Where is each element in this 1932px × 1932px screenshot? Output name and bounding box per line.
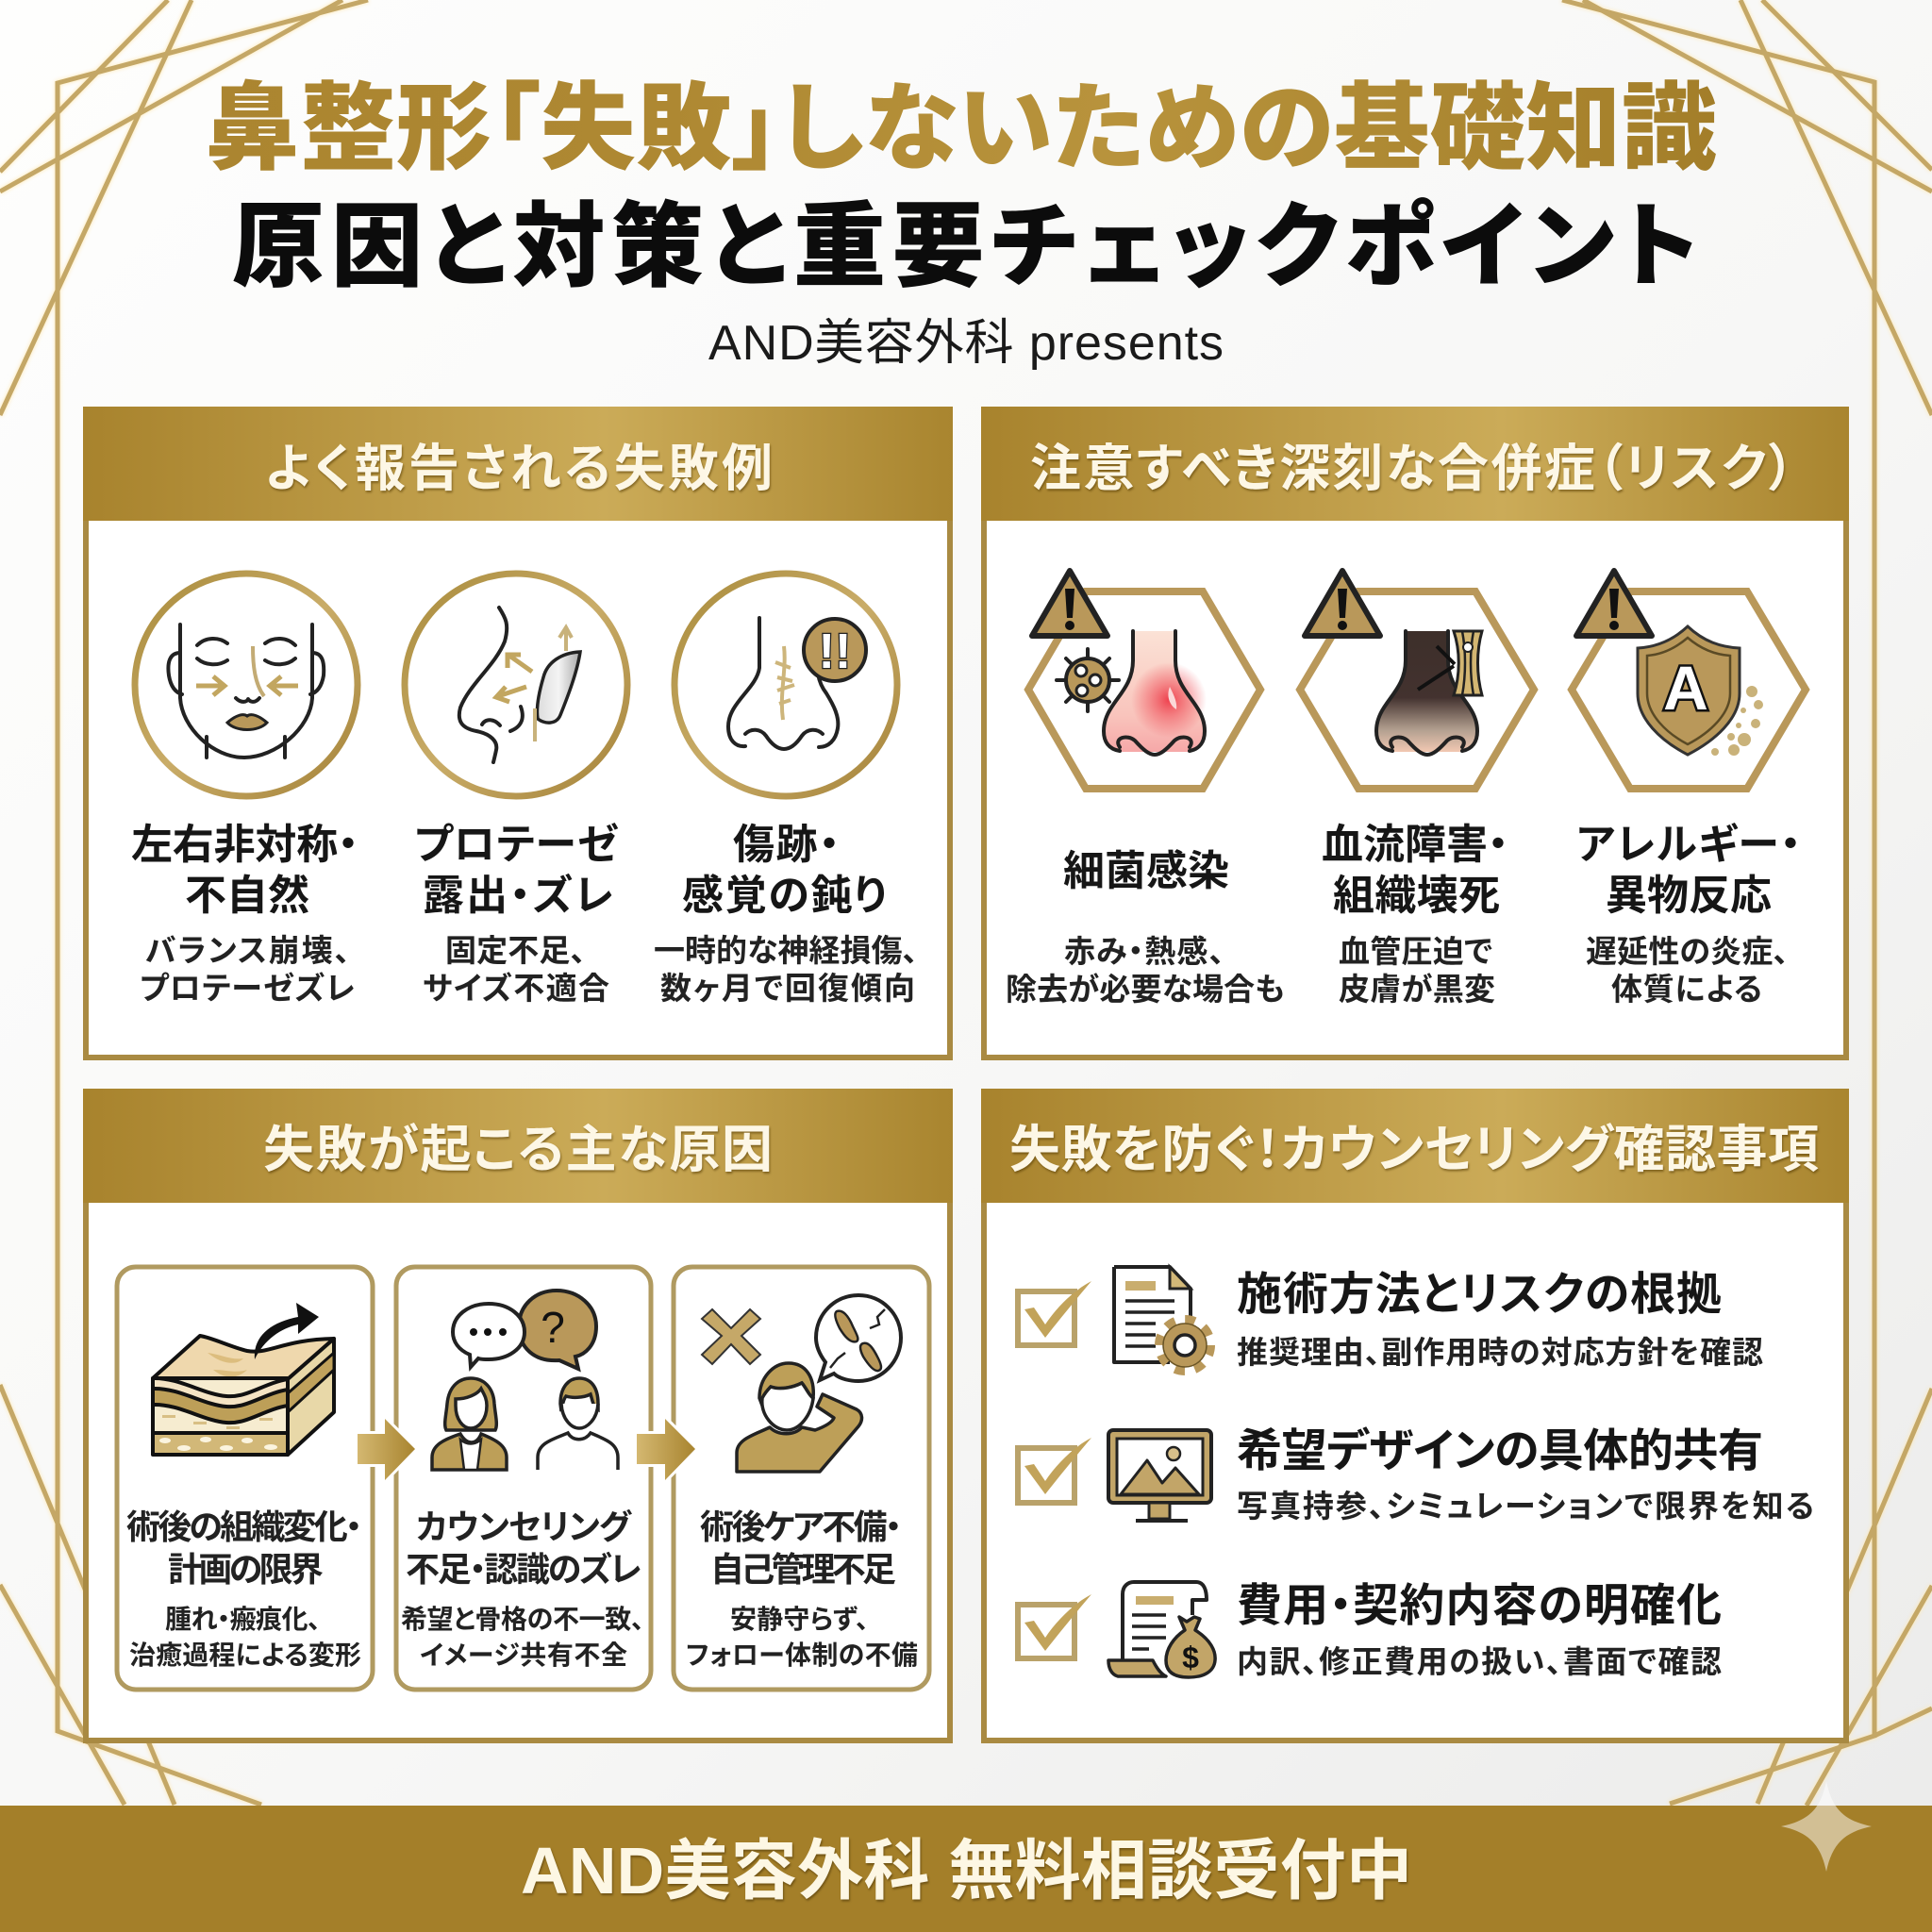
description: 固定不足、 (445, 933, 586, 968)
icon: shield with A: A (1663, 653, 1708, 723)
icon: upward arrow (255, 1303, 319, 1359)
icon: warning triangle (1032, 571, 1108, 636)
description: 一時的な神経損傷、 (654, 933, 918, 968)
description: 治癒過程による変形 (129, 1641, 361, 1670)
description (1006, 934, 1285, 1007)
item: scars and numbness (654, 574, 918, 1006)
panel 2 header band (981, 407, 1849, 521)
label: アレルギー・ (1576, 822, 1801, 868)
icon: nose with scar and alert: !! (819, 625, 851, 679)
description (129, 1605, 361, 1670)
footer text: AND美容外科 無料相談受付中 (521, 1834, 1412, 1907)
panel 2 body (984, 409, 1846, 1058)
label: 感覚の鈍り (682, 873, 887, 919)
icon: warning triangle (1576, 571, 1652, 636)
icon: monitor with image (1108, 1430, 1211, 1521)
label: 自己管理不足 (710, 1550, 896, 1589)
label: カウンセリング (416, 1507, 633, 1546)
icon: nose with scar and alert (675, 574, 897, 796)
label: プロテーゼ (414, 822, 618, 868)
item: asymmetry (131, 574, 358, 1006)
icon: speech bubbles (453, 1291, 596, 1369)
description: 赤み・熱感、 (1064, 934, 1224, 969)
subtitle: AND美容外科 presents (708, 316, 1224, 371)
icon: shield with A (1638, 626, 1740, 755)
description: 皮膚が黒変 (1339, 972, 1495, 1007)
icon: face in gold ring (135, 574, 358, 796)
label: 傷跡・ (733, 822, 840, 868)
description: 遅延性の炎症、 (1586, 934, 1789, 969)
description: 除去が必要な場合も (1006, 972, 1285, 1007)
label (131, 822, 358, 919)
description: 写真持参、シミュレーションで限界を知る (1237, 1489, 1814, 1524)
icon: inflamed nose (1104, 631, 1207, 755)
hexagon frame (1028, 591, 1260, 789)
description: サイズ不適合 (423, 971, 609, 1006)
panel 4 header band (981, 1089, 1849, 1203)
description (423, 933, 609, 1006)
label: 左右非対称・ (131, 822, 358, 868)
title: 施術方法とリスクの根拠 (1237, 1270, 1722, 1320)
title: 希望デザインの具体的共有 (1237, 1426, 1763, 1476)
description: 血管圧迫で (1339, 934, 1492, 969)
label: 術後の組織変化・ (126, 1507, 362, 1546)
icon: speech bubbles: ? (541, 1303, 565, 1352)
label: 異物反応 (1606, 873, 1772, 919)
label: 細菌感染 (1063, 848, 1229, 894)
hexagon frame (1300, 591, 1534, 789)
arrow: card 2 to card 3 (637, 1419, 695, 1480)
icon: X mark (702, 1309, 760, 1364)
description: 数ヶ月で回復傾向 (660, 971, 915, 1006)
card (117, 1267, 373, 1690)
arrow: card 1 to card 2 (358, 1419, 415, 1480)
cause card: counseling (396, 1267, 651, 1690)
label: 計画の限界 (168, 1550, 324, 1589)
checkbox (1018, 1594, 1091, 1658)
description: フォロー体制の不備 (686, 1641, 918, 1670)
panel 3 header band (83, 1089, 953, 1203)
description (140, 933, 355, 1006)
title line 1: 鼻整形「失敗」しないための基礎知識 (205, 76, 1717, 182)
panel 3 body (86, 1091, 950, 1740)
check item: design (1018, 1426, 1814, 1524)
icon: warning triangle (1305, 571, 1380, 636)
card (674, 1267, 929, 1690)
panel: counseling checklist (981, 1089, 1849, 1740)
label: 術後ケア不備・ (700, 1507, 902, 1546)
item: allergy (1572, 571, 1806, 1007)
description (1339, 934, 1495, 1007)
icon: document with gear (1114, 1267, 1210, 1371)
panel 1 header band (83, 407, 953, 521)
icon: worried person (737, 1363, 862, 1472)
panel 4 body (984, 1091, 1846, 1740)
label (406, 1507, 641, 1589)
panel 4 heading: 失敗を防ぐ！カウンセリング確認事項 (1009, 1122, 1819, 1178)
card (396, 1267, 651, 1690)
icon: necrotic nose (1376, 631, 1477, 755)
item: blood flow disorder (1300, 571, 1534, 1007)
label: 血流障害・ (1322, 822, 1508, 868)
icon: allergen particles (1711, 686, 1763, 756)
icon: skin layers (153, 1336, 334, 1455)
description: 安静守らず、 (730, 1605, 869, 1634)
icon: scroll contract and money bag (1108, 1582, 1215, 1677)
check item: cost (1018, 1581, 1722, 1679)
icon: bacterium (1057, 649, 1119, 711)
panel: common failures (83, 407, 953, 1058)
icon: nose profile with implant (405, 574, 627, 796)
panel 3 heading: 失敗が起こる主な原因 (263, 1122, 773, 1178)
item: bacterial infection (1006, 571, 1285, 1007)
description: 推奨理由、副作用時の対応方針を確認 (1237, 1335, 1763, 1370)
description: 体質による (1611, 972, 1762, 1007)
cause card: aftercare (674, 1267, 929, 1690)
label (414, 822, 618, 919)
label (1576, 822, 1801, 919)
panel 2 heading: 注意すべき深刻な合併症（リスク） (1030, 441, 1794, 497)
item: prosthesis exposure (405, 574, 627, 1006)
checkbox (1018, 1438, 1091, 1503)
footer band (0, 1806, 1932, 1932)
panel: serious complications (981, 407, 1849, 1058)
label: 露出・ズレ (423, 873, 613, 919)
label: 不足・認識のズレ (406, 1550, 641, 1589)
label: 組織壊死 (1333, 873, 1500, 919)
icon: scroll contract and money bag: $ (1182, 1641, 1199, 1674)
description: 腫れ・瘢痕化、 (165, 1605, 321, 1634)
hexagon frame (1572, 591, 1806, 789)
description: イメージ共有不全 (420, 1641, 627, 1670)
icon: sparkle star (1781, 1781, 1872, 1872)
icon: woman and man (432, 1378, 618, 1470)
check item: procedure (1018, 1267, 1763, 1371)
description (401, 1605, 644, 1670)
description: 内訳、修正費用の扱い、書面で確認 (1237, 1644, 1722, 1679)
label (126, 1507, 362, 1589)
description (654, 933, 918, 1006)
title: 費用・契約内容の明確化 (1237, 1581, 1722, 1631)
icon: compressed blood vessel (1418, 631, 1482, 695)
checkbox (1018, 1281, 1091, 1345)
panel: main causes (83, 1089, 953, 1740)
panel 1 body (86, 409, 950, 1058)
description (1586, 934, 1789, 1007)
panel 1 heading: よく報告される失敗例 (265, 441, 773, 497)
label (1322, 822, 1508, 919)
description: プロテーゼズレ (140, 971, 355, 1006)
description (686, 1605, 918, 1670)
label (700, 1507, 902, 1589)
cause card: tissue change (117, 1267, 373, 1690)
description: バランス崩壊、 (145, 933, 350, 968)
label (682, 822, 887, 919)
description: 希望と骨格の不一致、 (401, 1605, 644, 1634)
title line 2: 原因と対策と重要チェックポイント (232, 194, 1698, 298)
label: 不自然 (185, 873, 309, 919)
icon: broken implant bubble (816, 1295, 901, 1381)
